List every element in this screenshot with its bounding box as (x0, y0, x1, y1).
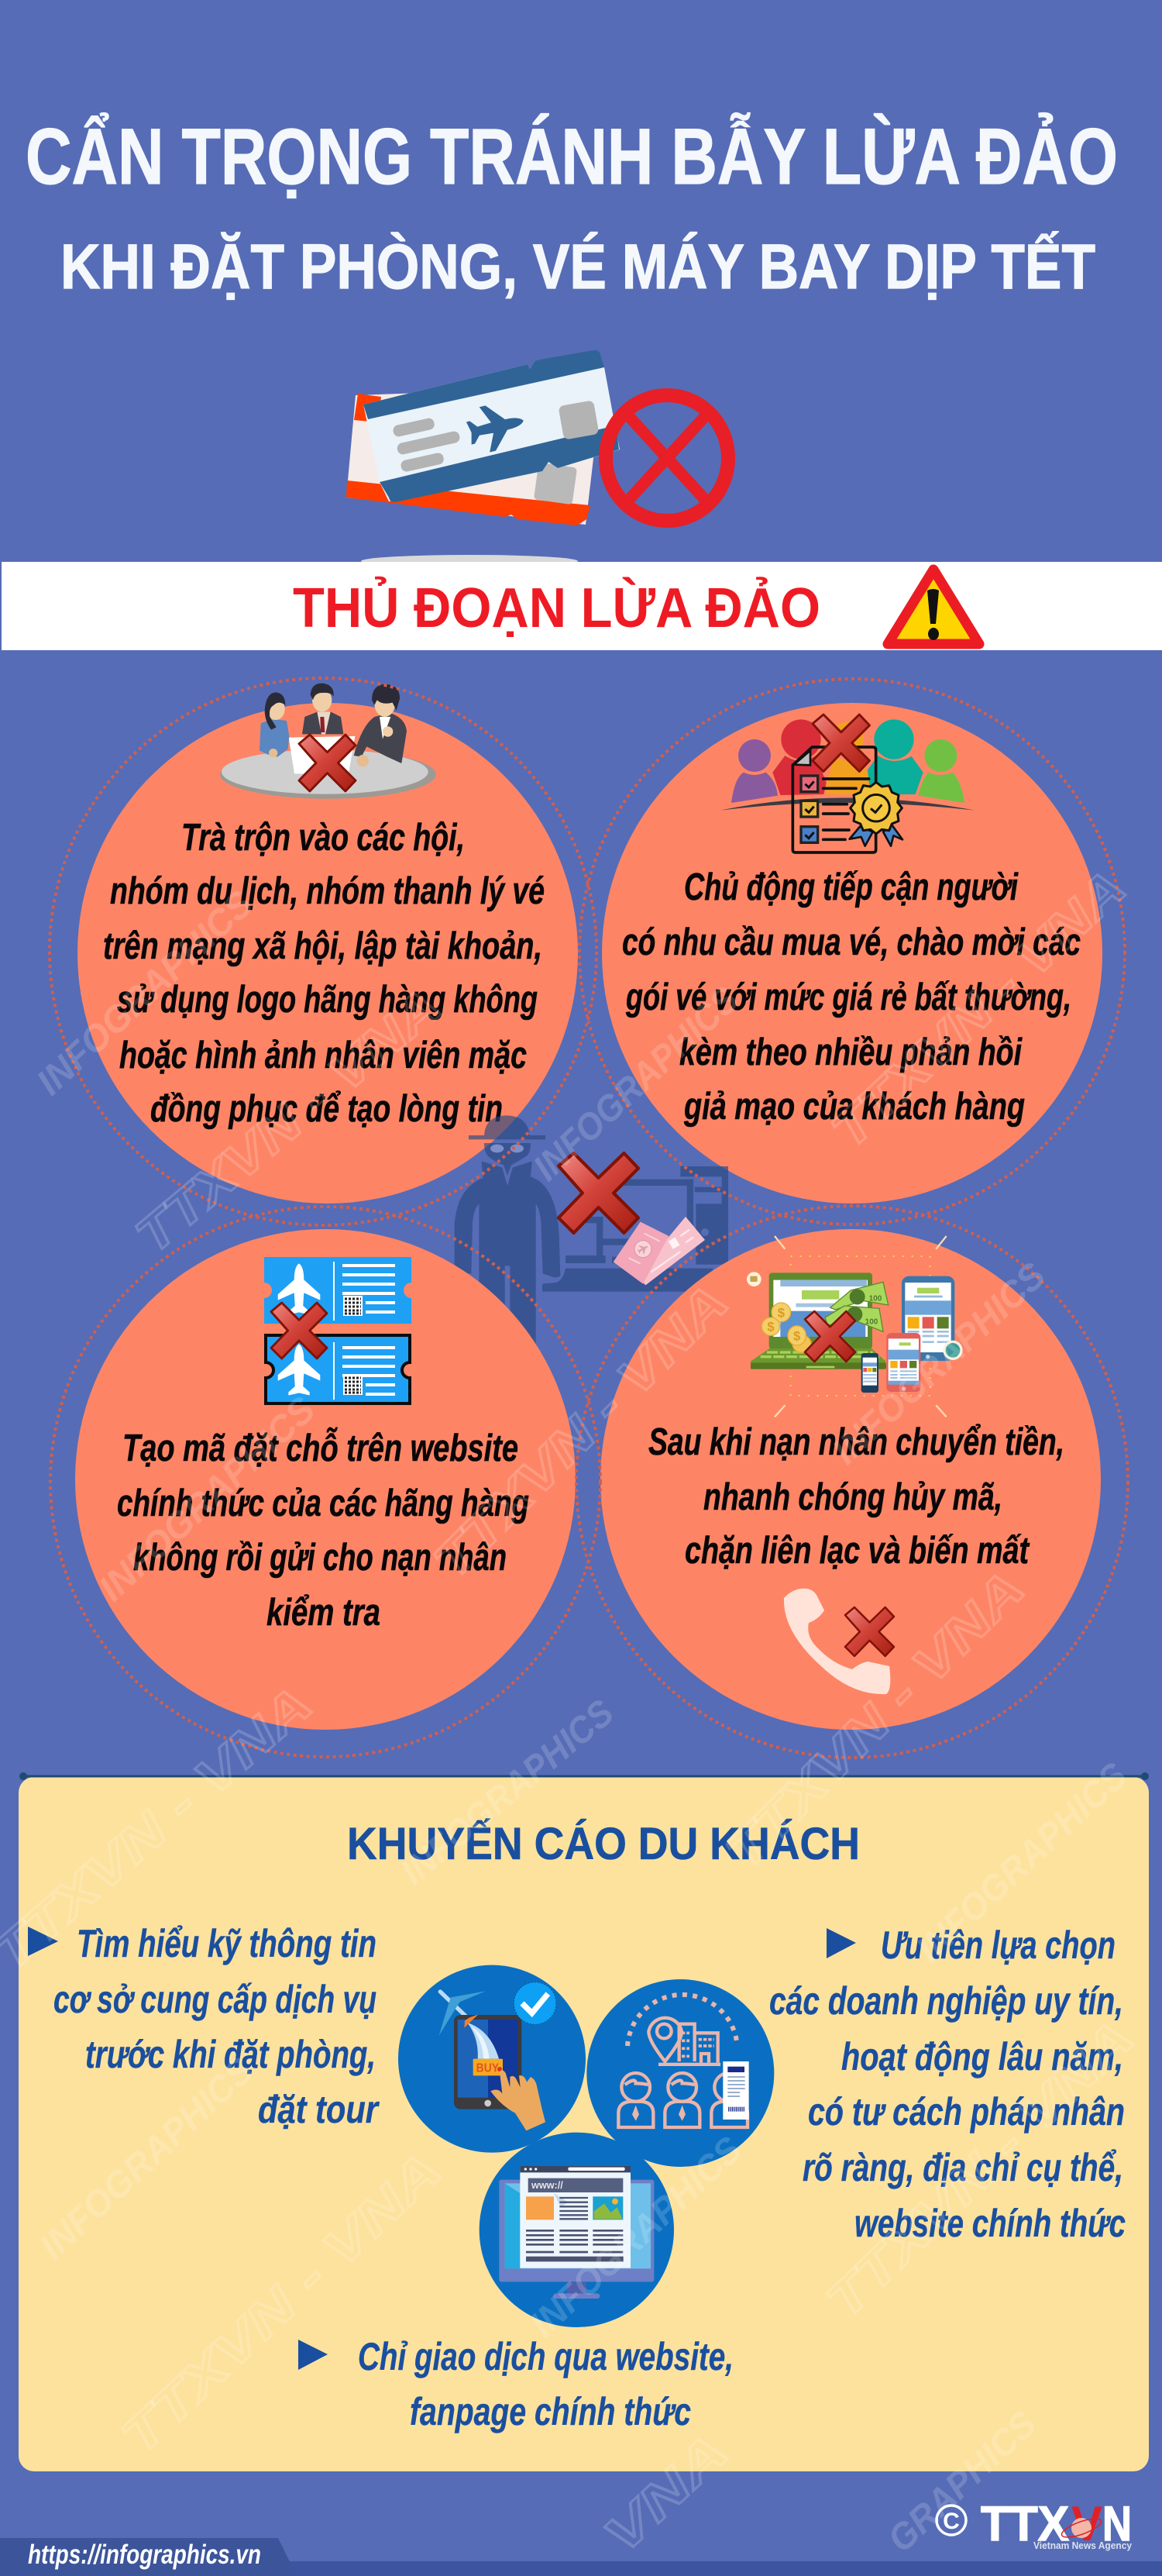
icon: main red cross (559, 1153, 638, 1233)
watermarks: INFOGRAPHICS (91, 1390, 323, 1610)
watermarks: GRAPHICS (880, 2404, 1044, 2561)
icon: red cross (299, 735, 356, 791)
icon: laptop, money and phones: $ (778, 1305, 786, 1320)
text: circle 4: nhanh chóng hủy mã, (703, 1476, 1002, 1518)
advice: left text: cơ sở cung cấp dịch vụ (53, 1978, 376, 2021)
text: circle 1: hoặc hình ảnh nhân viên mặc (119, 1035, 527, 1076)
text: circle 1: Trà trộn vào các hội, (181, 817, 465, 859)
section band: Thủ đoạn lừa đảo: THỦ ĐOẠN LỪA ĐẢO (293, 577, 820, 639)
panel: scam circle 3 (75, 1229, 576, 1730)
text: circle 1: đồng phục để tạo lòng tin (150, 1088, 503, 1130)
footer bar with URL: https://infographics.vn (28, 2540, 261, 2570)
watermarks: TTXVN - VNA (820, 859, 1136, 1159)
panel: scam circle 2 (602, 703, 1102, 1204)
icon: telephone handset (784, 1589, 890, 1694)
icon: laptop, money and phones: 100 (865, 1317, 878, 1326)
advice: right text (769, 1923, 1126, 2245)
advice: bottom text: fanpage chính thức (410, 2390, 691, 2433)
icon: laptop, money and phones: $ (793, 1328, 801, 1343)
icon: red cross (813, 715, 869, 772)
watermarks: INFOGRAPHICS (909, 1755, 1135, 1970)
logo: TTXVN: V (1071, 2497, 1102, 2551)
text: circle 4 (648, 1421, 1064, 1572)
text: circle 4: chặn liên lạc và biến mất (685, 1530, 1030, 1572)
icon: red cross (805, 1311, 855, 1362)
watermarks: INFOGRAPHICS (825, 1255, 1054, 1472)
logo: TTXVN: N (1102, 2497, 1132, 2551)
text: circle 1: trên mạng xã hội, lập tài khoản, (103, 925, 542, 967)
text: circle 2 (622, 866, 1081, 1128)
text: circle 3: kiểm tra (266, 1592, 380, 1634)
watermarks: TTXVN - VNA (816, 2009, 1144, 2330)
footer bar with URL (0, 2538, 1162, 2576)
advice: bottom text: Chỉ giao dịch qua website, (358, 2335, 734, 2378)
advice: left text: Tìm hiểu kỹ thông tin (77, 1922, 376, 1965)
watermarks: TTXVN - VNA (125, 977, 452, 1264)
text: circle 1: nhóm du lịch, nhóm thanh lý vé (110, 870, 545, 912)
watermarks: INFOGRAPHICS (526, 979, 747, 1189)
advice: left text (28, 1922, 380, 2131)
watermarks: INFOGRAPHICS (32, 2050, 262, 2268)
icon: thief and computer (455, 1115, 728, 1346)
watermarks: INFOGRAPHICS (523, 2129, 750, 2345)
heading: KHUYẾN CÁO DU KHÁCH (347, 1819, 860, 1869)
icon: warning triangle (888, 570, 979, 644)
icon: laptop, money and phones (747, 1236, 963, 1417)
text: circle 3: chính thức của các hãng hàng (117, 1483, 529, 1524)
icon: website on monitor: www:// (531, 2180, 563, 2191)
text: circle 3 (117, 1427, 529, 1634)
icons: three blue circles (398, 1965, 774, 2327)
panel: scam circle 4 (600, 1229, 1101, 1730)
section band: Thủ đoạn lừa đảo (2, 562, 1162, 650)
icon: red cross (845, 1607, 894, 1656)
title (26, 112, 1118, 302)
icon: tablet purchase: BUY (476, 2061, 499, 2075)
watermarks: VNA (593, 2423, 739, 2564)
icon: tablet purchase (398, 1965, 586, 2153)
watermarks: INFOGRAPHICS (394, 1693, 621, 1893)
watermarks (0, 859, 1144, 2564)
icon: laptop, money and phones: $ (767, 1320, 775, 1334)
logo: TTXVN: Vietnam News Agency (1033, 2540, 1133, 2551)
icon: red cross (271, 1303, 327, 1359)
icon: website on monitor (480, 2133, 674, 2327)
logo: TTXVN: C (943, 2509, 960, 2534)
watermarks: INFOGRAPHICS (29, 883, 261, 1104)
advice: left text: đặt tour (258, 2088, 380, 2131)
text: circle 1: sử dụng logo hãng hàng không (117, 979, 538, 1021)
icon: people at table (220, 684, 436, 799)
text: circle 2: giả mạo của khách hàng (683, 1086, 1025, 1128)
text: circle 2: kèm theo nhiều phản hồi (679, 1031, 1023, 1073)
icon: customers and checklist (720, 719, 975, 852)
icon: blue air tickets (264, 1257, 411, 1403)
icon: laptop, money and phones: 100 (869, 1294, 882, 1303)
watermarks: TTXVN - VNA (715, 1560, 1035, 1880)
logo: TTXVN (937, 2497, 1133, 2551)
panel: scam circle 1 (77, 684, 578, 1204)
panel: Khuyến cáo du khách (19, 1772, 1149, 2471)
advice: left text: trước khi đặt phòng, (85, 2033, 376, 2076)
text: circle 3: Tạo mã đặt chỗ trên website (122, 1427, 518, 1469)
text: circle 3: không rồi gửi cho nạn nhân (133, 1537, 507, 1579)
watermarks: TTXVN - VNA (111, 2141, 452, 2465)
text: circle 2: Chủ động tiếp cận người (684, 866, 1019, 908)
icon: location and people (586, 1979, 774, 2167)
dashed rings (50, 678, 1128, 1758)
icon: passport and boarding pass (614, 1217, 705, 1285)
icon: tickets with prohibition sign (346, 350, 728, 567)
watermarks: TTXVN - VNA (422, 1273, 738, 1589)
logo: TTXVN: TTX (981, 2497, 1069, 2551)
text: circle 1 (103, 817, 545, 1130)
advice: bottom text (298, 2335, 734, 2433)
